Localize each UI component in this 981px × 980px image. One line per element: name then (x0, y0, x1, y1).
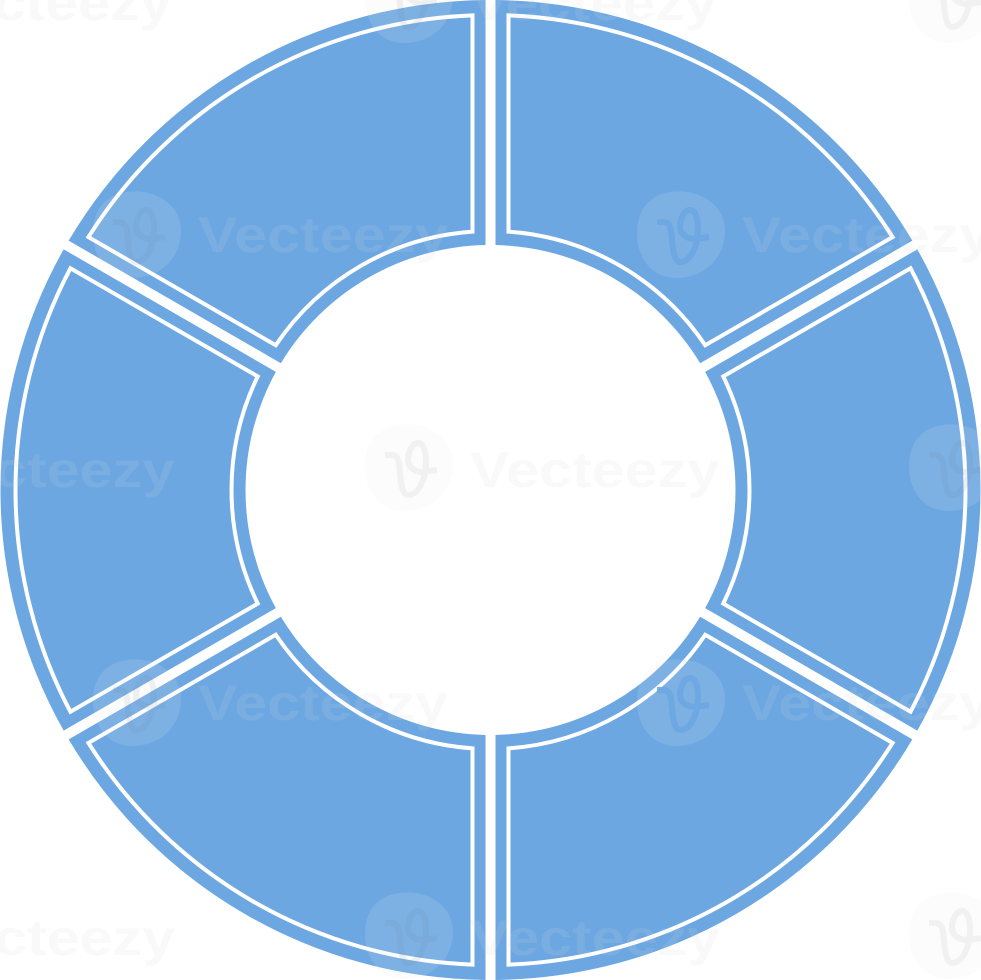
segment 2: right (705, 249, 980, 731)
icon: watermark logo, top centre (365, 0, 453, 43)
watermark wordmarks: Vecteezy (742, 207, 981, 263)
segment 1: upper right (496, 0, 912, 363)
watermark wordmarks: Vecteezy (470, 910, 720, 966)
icon: watermark logo, lower right (637, 659, 725, 746)
segment 4: lower left (69, 617, 486, 980)
icon: watermark logo, bottom centre (365, 892, 453, 979)
icon: watermark logo, upper right (637, 191, 725, 278)
watermark wordmarks: Vecteezy (198, 675, 448, 731)
icon: watermark logo, top right (909, 0, 981, 43)
segment 6: upper left (69, 0, 486, 363)
watermark wordmarks: Vecteezy (470, 442, 720, 498)
icon: watermark logo, lower left (93, 659, 181, 746)
icon: watermark logo, upper left (93, 191, 181, 278)
segment 5: left (0, 249, 276, 731)
watermark wordmarks: Vecteezy (742, 675, 981, 731)
icon: watermark logo, centre right (909, 424, 981, 511)
icon: watermark logo, bottom right (909, 892, 981, 979)
watermark wordmarks: Vecteezy (198, 207, 448, 263)
segment 3: lower right (496, 617, 912, 980)
icon: watermark logo, centre (365, 424, 453, 511)
